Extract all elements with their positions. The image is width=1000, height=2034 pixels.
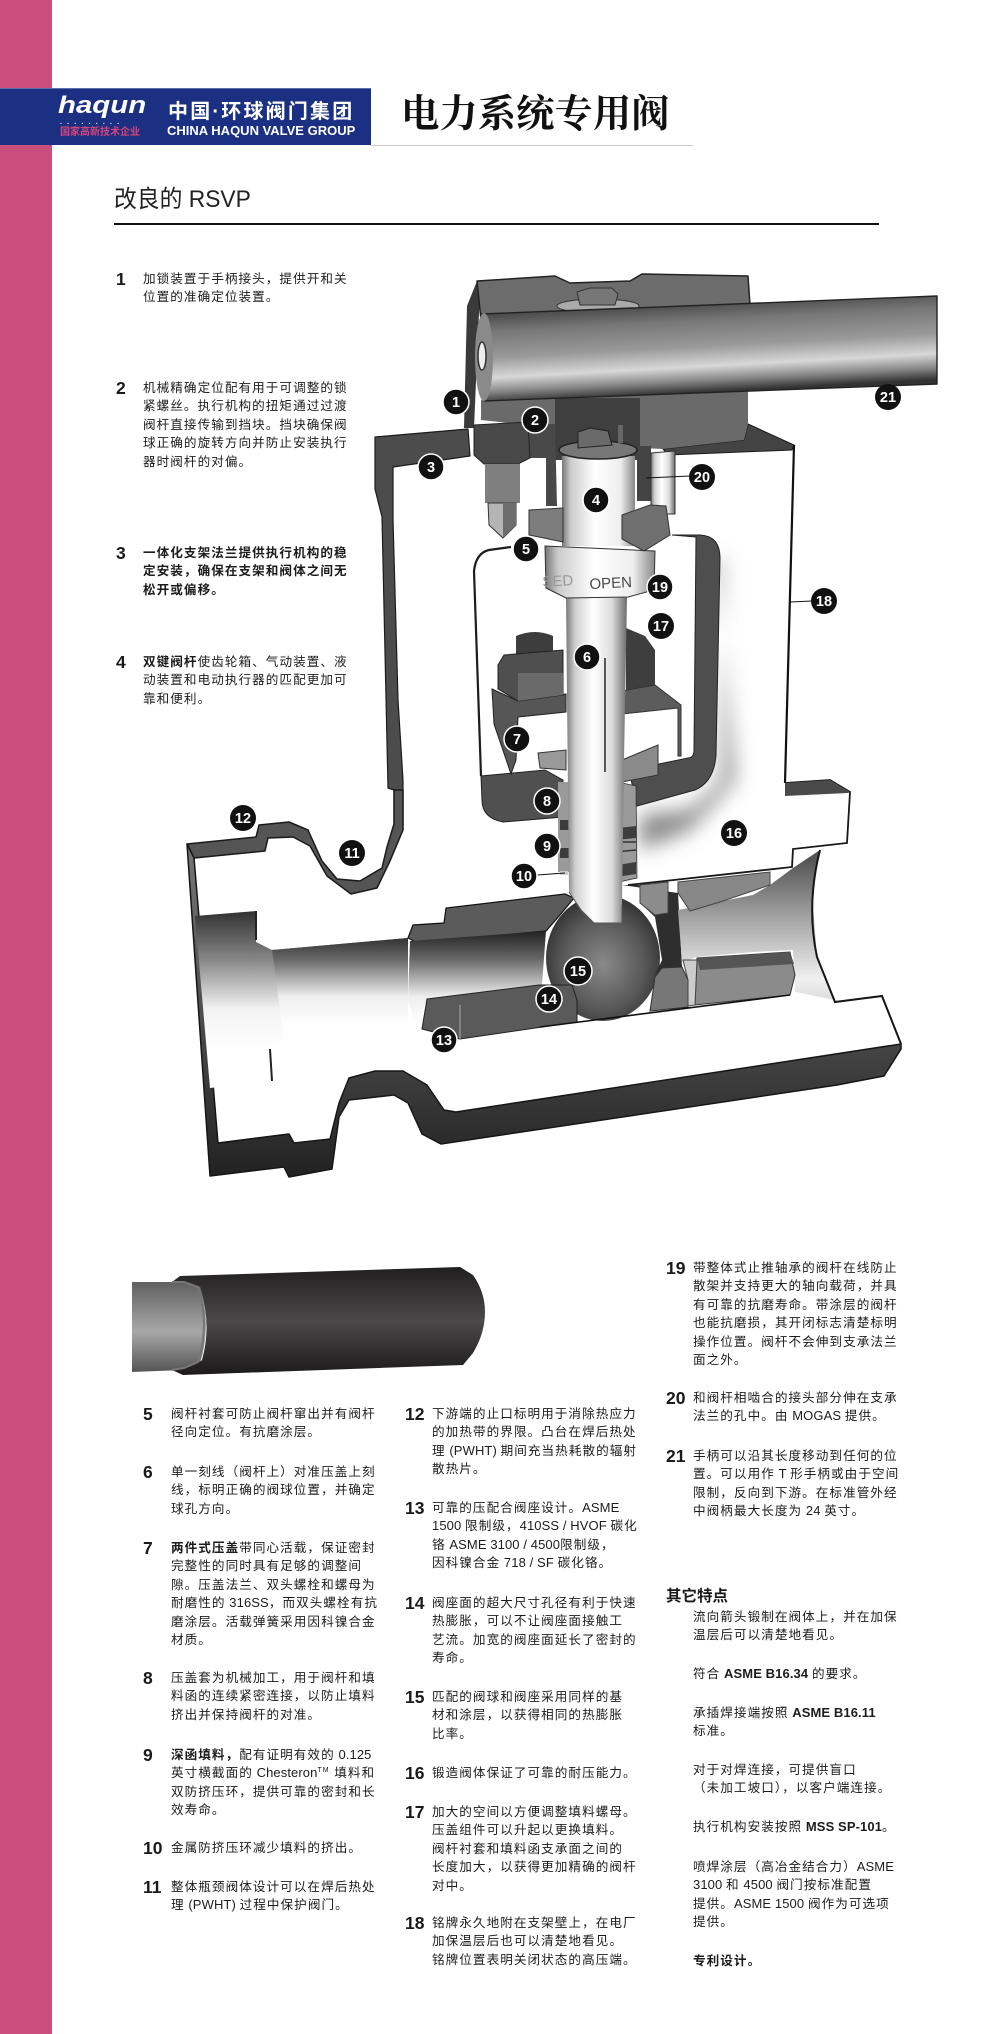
- pink sidebar: [0, 0, 52, 2034]
- feature 3: 松开或偏移。: [143, 583, 225, 597]
- lower body bottom rim: [187, 844, 901, 1177]
- feature 13: 可靠的压配合阀座设计。ASME: [432, 1500, 619, 1515]
- callout 8: [534, 788, 560, 814]
- feature 14: 阀座面的超大尺寸孔径有利于快速: [432, 1596, 637, 1610]
- callout 14: 14: [541, 992, 557, 1008]
- feature 18: 加保温层后也可以清楚地看见。: [432, 1934, 623, 1948]
- feature 2: 阀杆直接传输到挡块。挡块确保阀: [143, 418, 348, 432]
- other feature: coating: 提供。: [693, 1915, 734, 1929]
- coated sleeve: [172, 1267, 485, 1375]
- feature 11: [143, 1877, 376, 1912]
- lower right seat ring: [695, 952, 795, 1005]
- cavity right rim: [630, 535, 720, 806]
- feature 14: 艺流。加宽的阀座面延长了密封的: [432, 1633, 637, 1647]
- subtitle rule: [114, 223, 879, 225]
- feature 6: 单一刻线（阀杆上）对准压盖上刻: [171, 1465, 376, 1479]
- feature 4: 动装置和电动执行器的匹配更加可: [143, 673, 348, 687]
- callout 5: 5: [522, 542, 530, 558]
- feature 20: 20: [666, 1388, 685, 1408]
- subtitle: 改良的 RSVP: [114, 186, 251, 213]
- other feature: butt weld: （未加工坡口），以客户端连接。: [693, 1781, 891, 1795]
- stem adapter cylinder: [559, 425, 637, 546]
- feature 17: 对中。: [432, 1879, 473, 1893]
- shadow right of cavity: [640, 560, 735, 850]
- feature 19: 操作位置。阀杆不会伸到支承法兰: [693, 1335, 898, 1349]
- feature 13: 13: [405, 1498, 424, 1518]
- feature 15: 15: [405, 1687, 424, 1707]
- feature 12: 12: [405, 1404, 424, 1424]
- feature 2: 紧螺丝。执行机构的扭矩通过过渡: [143, 399, 348, 413]
- feature 21: [666, 1446, 899, 1518]
- feature 21: 中阀柄最大长度为 24 英寸。: [693, 1503, 865, 1518]
- handle head top: [477, 274, 750, 320]
- feature 12: 的加热带的界限。凸台在焊后热处: [432, 1425, 637, 1439]
- feature 7: 耐磨性的 316SS，而双头螺栓有抗: [171, 1595, 378, 1610]
- feature 20: 和阀杆相啮合的接头部分伸在支承: [693, 1391, 898, 1405]
- logo tagline: 国家高新技术企业: [60, 127, 140, 138]
- callout 7: [504, 726, 530, 752]
- feature 15: 比率。: [432, 1727, 473, 1741]
- logo wordmark: haqun: [58, 92, 146, 119]
- feature 15: 匹配的阀球和阀座采用同样的基: [432, 1690, 623, 1704]
- feature 7: 材质。: [171, 1633, 212, 1647]
- feature 7: 磨涂层。活载弹簧采用因科镍合金: [171, 1615, 376, 1629]
- feature 18: 铭牌永久地附在支架壁上，在电厂: [432, 1916, 637, 1930]
- feature 21: 21: [666, 1446, 685, 1466]
- other feature: butt weld: 对于对焊连接，可提供盲口: [693, 1763, 857, 1777]
- feature 7: 完整性的同时具有足够的调整间: [171, 1559, 362, 1573]
- other feature: ASME B16.11: [693, 1705, 876, 1738]
- feature 21: 置。可以用作 T 形手柄或由于空间: [693, 1466, 899, 1481]
- feature 3: [116, 543, 348, 597]
- feature 19: 也能抗磨损，其开闭标志清楚标明: [693, 1316, 898, 1330]
- callout 10: 10: [516, 869, 532, 885]
- feature 7: [143, 1538, 378, 1647]
- upper right seat: [678, 872, 770, 911]
- other feature: actuator mount: 执行机构安装按照 MSS SP-101。: [693, 1819, 896, 1834]
- feature 12: 下游端的止口标明用于消除热应力: [432, 1407, 637, 1421]
- handle head lower: [481, 388, 748, 449]
- feature 12: [405, 1404, 637, 1476]
- callout 18: [811, 588, 837, 614]
- engraved stem line: [604, 658, 606, 772]
- callout 14: [536, 986, 562, 1012]
- callout 17: [648, 613, 674, 639]
- closed marking: SED: [542, 572, 574, 591]
- left lug: [529, 508, 563, 542]
- callout 17: 17: [653, 619, 669, 635]
- callout 15: [564, 957, 592, 985]
- head block left dark rim: [464, 281, 480, 428]
- callout 12: [230, 805, 256, 831]
- valve cutaway illustration: [187, 274, 937, 1177]
- bottom flange stop line: [256, 911, 272, 1081]
- stem neck shadow: [555, 398, 640, 460]
- other feature: butt weld: [693, 1763, 891, 1795]
- callout 2: [522, 407, 548, 433]
- feature 2: 2: [116, 378, 126, 398]
- feature 18: [405, 1913, 637, 1967]
- feature 10: 10: [143, 1838, 162, 1858]
- feature 9: 深函填料，配有证明有效的 0.125: [171, 1747, 371, 1762]
- feature 3: 定安装，确保在支架和阀体之间无: [143, 564, 348, 578]
- feature 17: [405, 1802, 637, 1893]
- operating collar: [542, 546, 655, 598]
- left flange counterbore and bore: [195, 911, 408, 1088]
- right bore end: [753, 850, 835, 1000]
- feature 18: 18: [405, 1913, 424, 1933]
- left nut: [498, 650, 563, 701]
- coated stem photo: [132, 1267, 485, 1375]
- feature 6: 6: [143, 1462, 153, 1482]
- sleeve rim highlight: [172, 1282, 204, 1370]
- seat bore: [408, 931, 546, 1026]
- seat spacer: [650, 967, 688, 1011]
- right yoke rim: [663, 424, 794, 455]
- feature 20: [666, 1388, 898, 1423]
- header rule: [371, 145, 693, 146]
- callout 3: 3: [427, 460, 435, 476]
- feature 12: 理 (PWHT) 期间充当热耗散的辐射: [432, 1443, 637, 1458]
- company name Chinese: 中国·环球阀门集团: [168, 101, 354, 123]
- feature 8: 8: [143, 1668, 153, 1688]
- other feature: flow arrow: 温层后可以清楚地看见。: [693, 1628, 843, 1642]
- callout 4: [583, 487, 609, 513]
- feature 21: 手柄可以沿其长度移动到任何的位: [693, 1449, 898, 1463]
- callout 3: [418, 454, 444, 480]
- feature 8: [143, 1668, 376, 1722]
- callout 12: 12: [235, 811, 251, 827]
- stop bolt: [474, 422, 530, 538]
- feature 11: 整体瓶颈阀体设计可以在焊后热处: [171, 1880, 376, 1894]
- callout 7: 7: [513, 732, 521, 748]
- callout 8: 8: [543, 794, 551, 810]
- callout 19: [647, 574, 673, 600]
- feature 17: 17: [405, 1802, 424, 1822]
- lower body top rim with neck: [187, 790, 403, 894]
- right stud and nut: [626, 628, 655, 690]
- feature 9: 9: [143, 1745, 153, 1765]
- feature 18: 铭牌位置表明关闭状态的高压端。: [432, 1953, 637, 1967]
- feature 13: 因科镍合金 718 / SF 碳化铬。: [432, 1555, 612, 1570]
- feature 21: 限制，反向到下游。在标准管外经: [693, 1486, 898, 1500]
- lower stem: [566, 597, 627, 923]
- callout 21: [875, 384, 901, 410]
- lower body face line: [540, 995, 790, 1027]
- bare stem section: [132, 1282, 206, 1372]
- feature 7: 两件式压盖带同心活载，保证密封: [171, 1541, 376, 1555]
- callout 15: 15: [570, 964, 586, 980]
- callout 13: 13: [436, 1033, 452, 1049]
- feature 5: 径向定位。有抗磨涂层。: [171, 1425, 321, 1439]
- cavity left outline: [474, 547, 511, 776]
- feature 13: 1500 限制级，410SS / HVOF 碳化: [432, 1518, 638, 1533]
- other feature: coating: [693, 1859, 894, 1929]
- feature 5: [143, 1404, 376, 1439]
- callout 6: [574, 644, 600, 670]
- open marking: OPEN: [589, 574, 632, 593]
- other feature: coating: 提供。ASME 1500 阀作为可选项: [693, 1896, 890, 1911]
- feature 17: 加大的空间以方便调整填料螺母。: [432, 1805, 637, 1819]
- callout 1: [443, 389, 469, 415]
- feature 19: 带整体式止推轴承的阀杆在线防止: [693, 1261, 898, 1275]
- gland right tab: [622, 745, 658, 782]
- callout 10: [511, 863, 537, 889]
- other feature: patent: 专利设计。: [693, 1954, 761, 1968]
- header logo banner: [0, 88, 371, 145]
- other feature: ASME B16.34: 符合 ASME B16.34 的要求。: [693, 1666, 867, 1681]
- callout 9: [534, 833, 560, 859]
- callout 18: 18: [816, 594, 832, 610]
- ball: [546, 895, 660, 1021]
- company name English: CHINA HAQUN VALVE GROUP: [167, 123, 355, 138]
- callout 11: [339, 840, 365, 866]
- feature 10: 金属防挤压环减少填料的挤出。: [171, 1841, 362, 1855]
- feature 13: [405, 1498, 638, 1570]
- other feature: ASME B16.11: 标准。: [693, 1724, 734, 1738]
- feature 1: 位置的准确定位装置。: [143, 290, 279, 304]
- feature 14: 热膨胀，可以不让阀座面接触工: [432, 1614, 623, 1628]
- callout 16: 16: [726, 826, 742, 842]
- other feature: flow arrow: [693, 1610, 898, 1642]
- other feature: coating: 喷焊涂层（高冶金结合力）ASME: [693, 1859, 894, 1874]
- right bore: [678, 895, 753, 962]
- callout 9: 9: [543, 839, 551, 855]
- feature 11: 理 (PWHT) 过程中保护阀门。: [171, 1897, 349, 1912]
- left gland flange: [492, 689, 566, 774]
- feature 16: 锻造阀体保证了可靠的耐压能力。: [432, 1766, 637, 1780]
- bore top shading: [272, 938, 408, 1039]
- feature 8: 挤出并保持阀杆的对准。: [171, 1708, 321, 1722]
- feature 10: [143, 1838, 362, 1858]
- callout 1: 1: [452, 395, 460, 411]
- right flange rim: [785, 780, 850, 796]
- feature 6: [143, 1462, 376, 1516]
- feature 9: 效寿命。: [171, 1803, 226, 1817]
- feature 6: 线，标明正确的阀球位置，并确定: [171, 1483, 376, 1497]
- right gland flange: [622, 685, 681, 756]
- main title: 电力系统专用阀: [401, 94, 670, 136]
- feature 1: 加锁装置于手柄接头，提供开和关: [143, 272, 348, 286]
- callout 13: [431, 1027, 457, 1053]
- feature 19: 散架并支持更大的轴向载荷，并具: [693, 1279, 898, 1293]
- feature 19: 有可靠的抗磨寿命。带涂层的阀杆: [693, 1298, 898, 1312]
- upper seat block: [640, 882, 668, 915]
- feature 8: 料函的连续紧密连接，以防止填料: [171, 1689, 376, 1703]
- feature 2: [116, 378, 348, 469]
- feature 15: 材和涂层，以获得相同的热膨胀: [432, 1708, 623, 1722]
- feature 2: 器时阀杆的对偏。: [143, 455, 252, 469]
- feature 7: 7: [143, 1538, 153, 1558]
- feature 2: 机械精确定位配有用于可调整的锁: [143, 381, 348, 395]
- leader lines: [537, 476, 812, 875]
- feature 19: 面之外。: [693, 1353, 748, 1367]
- callout 16: [721, 820, 747, 846]
- feature 19: 19: [666, 1258, 685, 1278]
- numbered callouts: [230, 384, 901, 1053]
- feature 9: 双防挤压环，提供可靠的密封和长: [171, 1785, 376, 1799]
- feature 4: 4: [116, 652, 126, 672]
- left seat pocket: [408, 894, 574, 943]
- feature 17: 压盖组件可以升起以更换填料。: [432, 1823, 623, 1837]
- right end bore line: [812, 850, 901, 1044]
- feature 14: [405, 1593, 637, 1665]
- left stud: [516, 632, 553, 660]
- feature 9: 英寸横截面的 ChesteronTM 填料和: [171, 1765, 375, 1780]
- feature 7: 隙。压盖法兰、双头螺栓和螺母为: [171, 1578, 376, 1592]
- feature 8: 压盖套为机械加工，用于阀杆和填: [171, 1671, 376, 1685]
- other feature: coating: 3100 和 4500 阀门按标准配置: [693, 1877, 872, 1892]
- feature 4: 双键阀杆使齿轮箱、气动装置、液: [143, 655, 348, 669]
- feature 16: 16: [405, 1763, 424, 1783]
- left packing stack: [558, 782, 569, 875]
- callout 2: 2: [531, 413, 539, 429]
- callout 4: 4: [592, 493, 600, 509]
- right packing stack: [608, 782, 637, 884]
- feature 19: [666, 1258, 898, 1367]
- cavity floor left: [481, 770, 563, 822]
- callout 21: 21: [880, 390, 896, 406]
- top washer and hex bolt: [557, 288, 639, 313]
- feature 12: 散热片。: [432, 1462, 487, 1476]
- feature 4: [116, 652, 348, 706]
- gland left tab: [538, 750, 566, 770]
- feature 5: 5: [143, 1404, 153, 1424]
- right body flange outline: [628, 780, 850, 885]
- feature 1: [116, 269, 348, 304]
- callout 19: 19: [652, 580, 668, 596]
- handle bar: [481, 296, 937, 401]
- callout 11: 11: [344, 846, 360, 862]
- right lug: [622, 505, 670, 551]
- feature 14: 寿命。: [432, 1651, 473, 1665]
- yoke flange and left wall rim: [375, 429, 470, 826]
- callout 5: [513, 536, 539, 562]
- callout 20: [689, 464, 715, 490]
- post 20: [651, 451, 675, 514]
- handle end face: [475, 313, 493, 401]
- feature 17: 长度加大，以获得更加精确的阀杆: [432, 1860, 637, 1874]
- feature 3: 3: [116, 543, 126, 563]
- feature 4: 靠和便利。: [143, 692, 211, 706]
- feature 20: 法兰的孔中。由 MOGAS 提供。: [693, 1408, 886, 1423]
- right edge line: [785, 445, 794, 783]
- feature 16: [405, 1763, 637, 1783]
- feature 5: 阀杆衬套可防止阀杆窜出并有阀杆: [171, 1407, 376, 1421]
- left seat ring: [422, 985, 577, 1039]
- feature 14: 14: [405, 1593, 424, 1613]
- feature 3: 一体化支架法兰提供执行机构的稳: [143, 546, 348, 560]
- callout 20: 20: [694, 470, 710, 486]
- callout 6: 6: [583, 650, 591, 666]
- feature 11: 11: [143, 1877, 162, 1897]
- dark gap beside ball: [622, 885, 682, 975]
- logo dots: .........: [60, 119, 124, 126]
- other feature: flow arrow: 流向箭头锻制在阀体上，并在加保: [693, 1610, 898, 1624]
- feature 9: [143, 1745, 376, 1817]
- feature 2: 球正确的旋转方向并防止安装执行: [143, 436, 348, 450]
- feature 15: [405, 1687, 623, 1741]
- feature 6: 球孔方向。: [171, 1502, 239, 1516]
- feature 1: 1: [116, 269, 126, 289]
- feature 13: 铬 ASME 3100 / 4500限制级，: [432, 1537, 615, 1552]
- other features heading: 其它特点: [666, 1588, 728, 1605]
- other feature: ASME B16.11: 承插焊接端按照 ASME B16.11: [693, 1705, 876, 1720]
- feature 17: 阀杆衬套和填料函支承面之间的: [432, 1842, 623, 1856]
